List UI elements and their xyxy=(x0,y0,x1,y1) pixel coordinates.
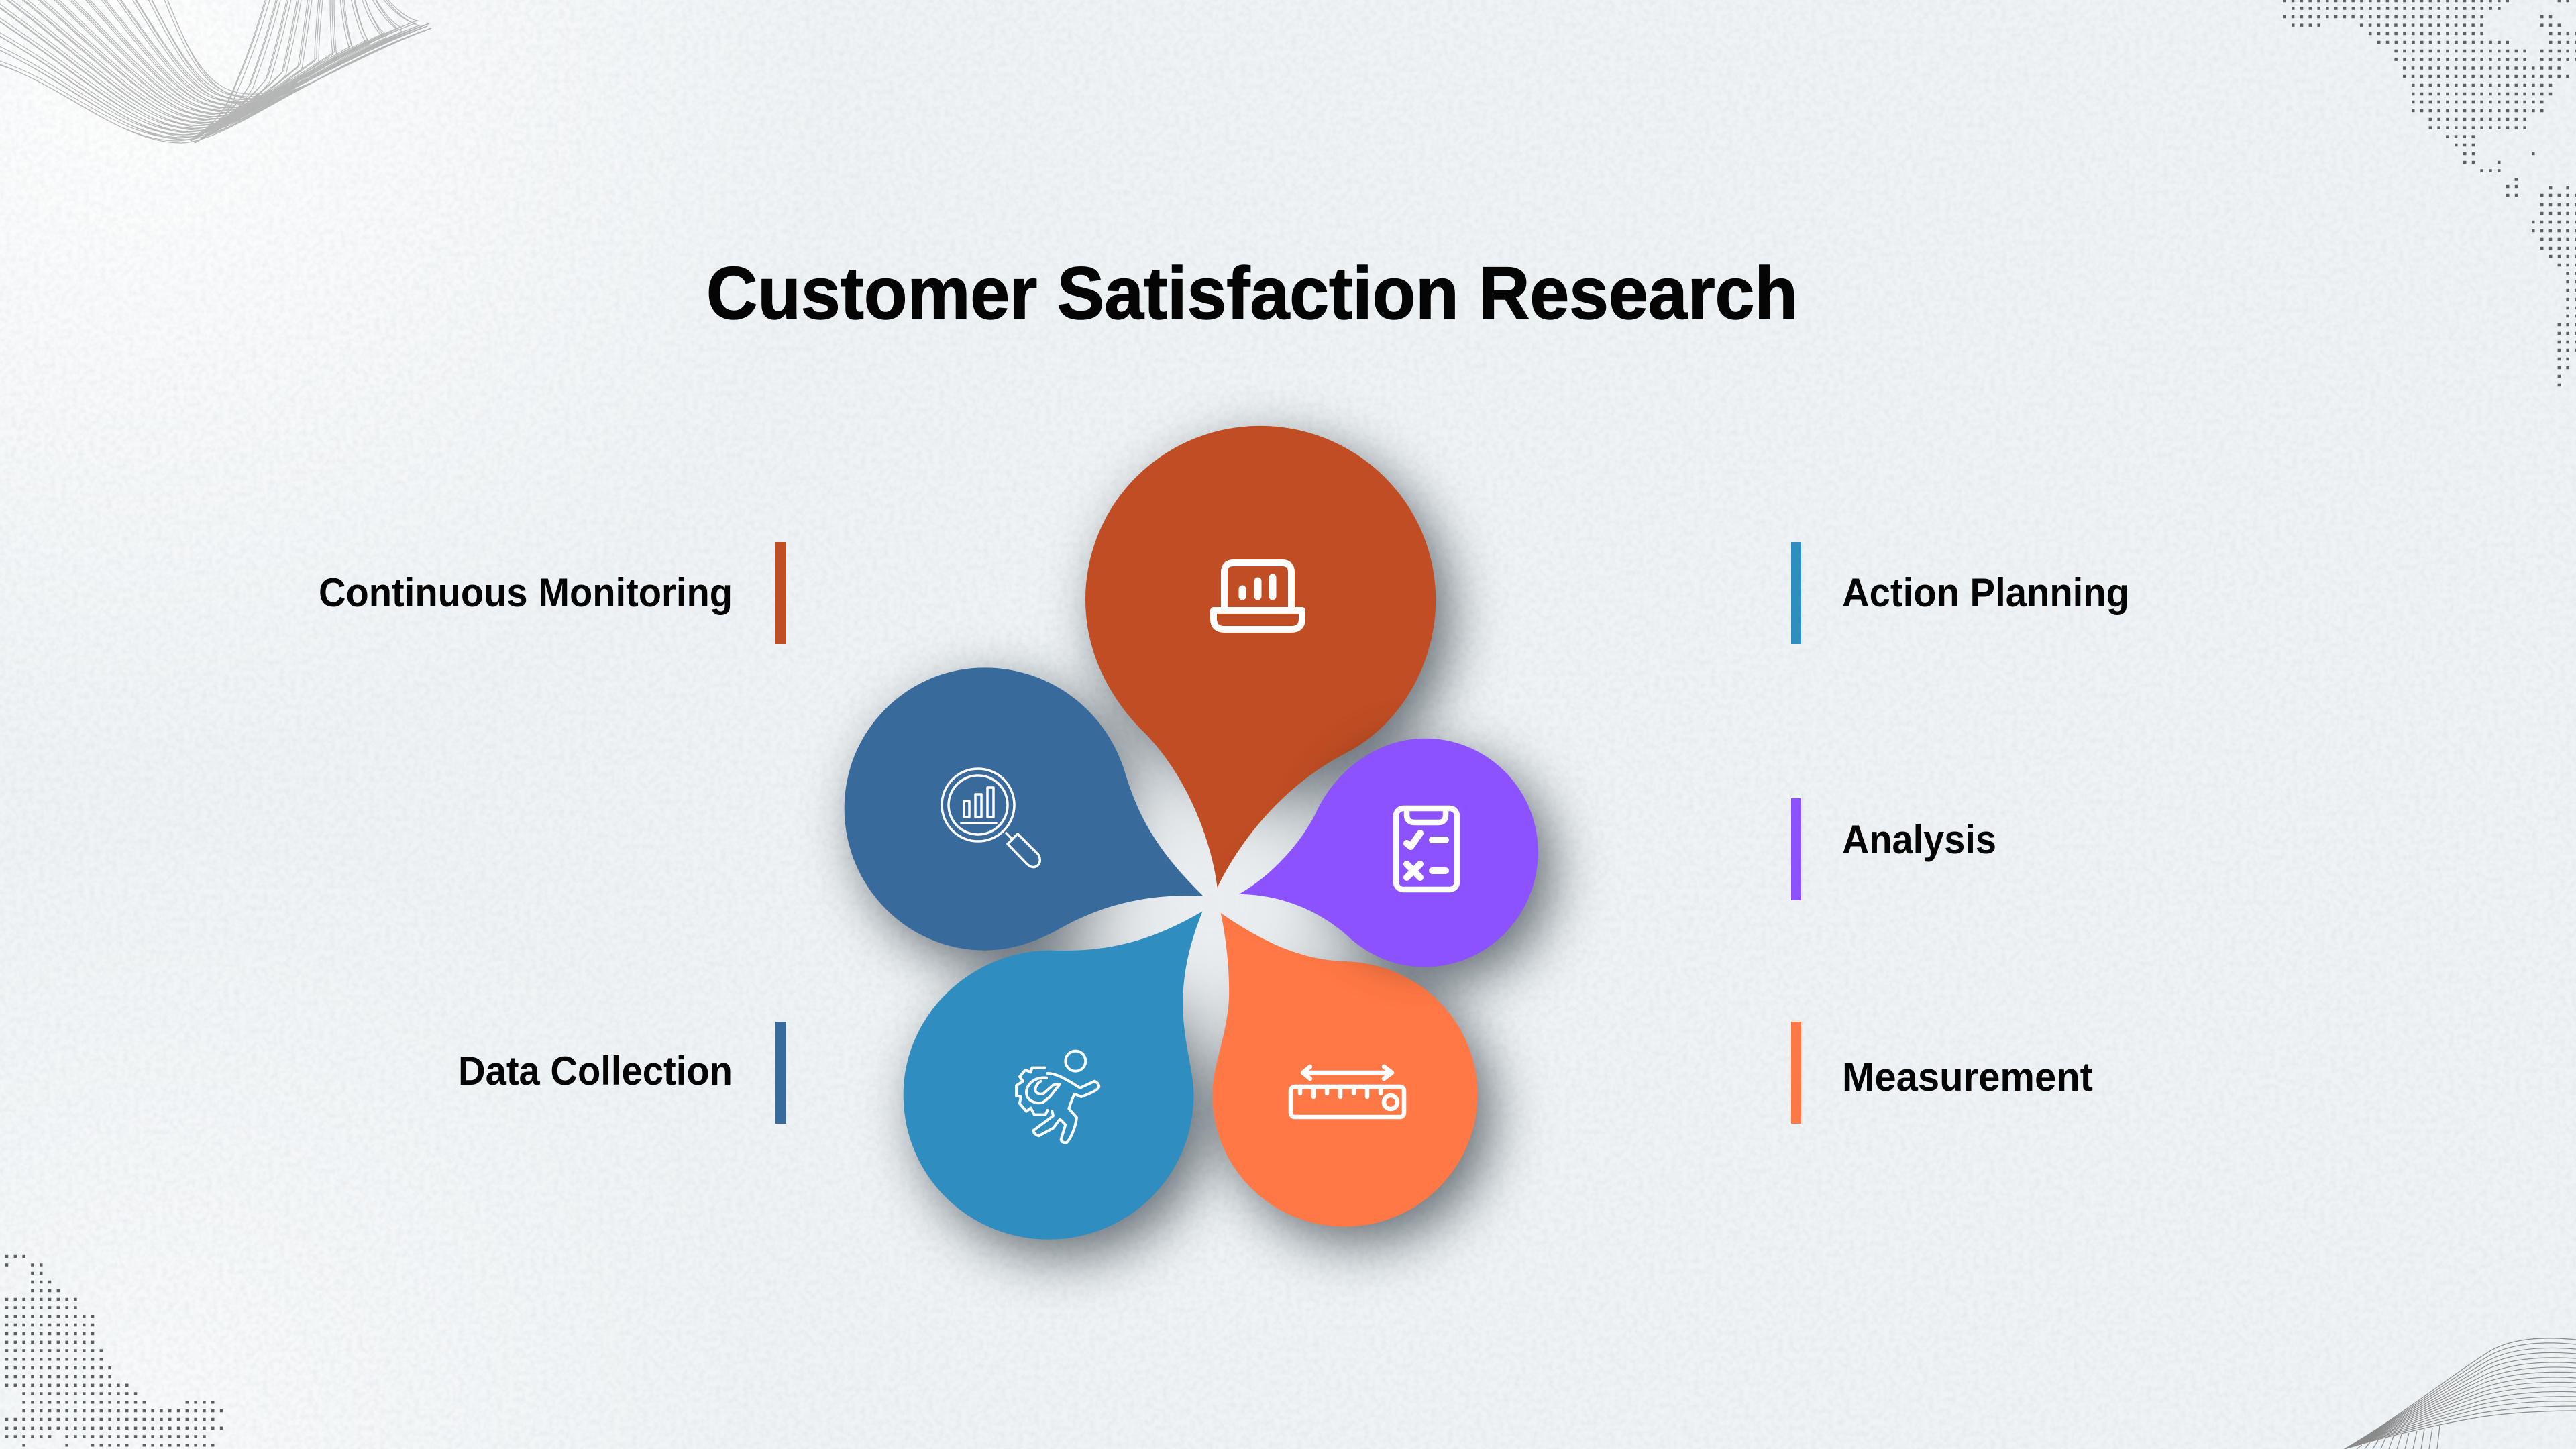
petal: measurement xyxy=(1212,913,1478,1227)
petal: analysis xyxy=(1239,739,1538,967)
label: Action Planning: Action Planning xyxy=(1842,570,2129,615)
petal shadows xyxy=(845,426,1538,1240)
centre gap highlight xyxy=(1083,775,1338,1030)
label: Measurement: Measurement xyxy=(1842,1055,2093,1099)
shadow of purple petal on neighbours xyxy=(1320,724,1426,990)
icon: magnifier with chart xyxy=(942,769,1040,867)
label: Analysis xyxy=(1791,798,1996,900)
icon: runner with gear xyxy=(1016,1051,1099,1142)
label: Action Planning xyxy=(1791,542,2129,644)
icon: clipboard checklist xyxy=(1396,808,1457,890)
petal: research analysis xyxy=(845,667,1203,951)
petal: continuous monitoring xyxy=(1085,426,1436,888)
decorative dot map: bottom left xyxy=(5,1256,223,1445)
label: Data Collection: Data Collection xyxy=(458,1049,733,1093)
title: Customer Satisfaction Research xyxy=(706,252,1798,335)
icon: ruler with arrow xyxy=(1291,1067,1404,1117)
label: Measurement xyxy=(1791,1022,2093,1124)
label: Continuous Monitoring xyxy=(319,542,786,644)
decorative dot map: top right xyxy=(2283,1,2576,385)
label: Analysis: Analysis xyxy=(1842,817,1996,862)
petal: data collection xyxy=(904,912,1203,1240)
label: Continuous Monitoring: Continuous Monitoring xyxy=(319,570,733,615)
icon: laptop with bar chart xyxy=(1214,563,1302,629)
decorative wave: bottom right xyxy=(2345,1338,2576,1449)
label: Data Collection xyxy=(458,1022,786,1124)
decorative wave: top left xyxy=(0,0,431,143)
